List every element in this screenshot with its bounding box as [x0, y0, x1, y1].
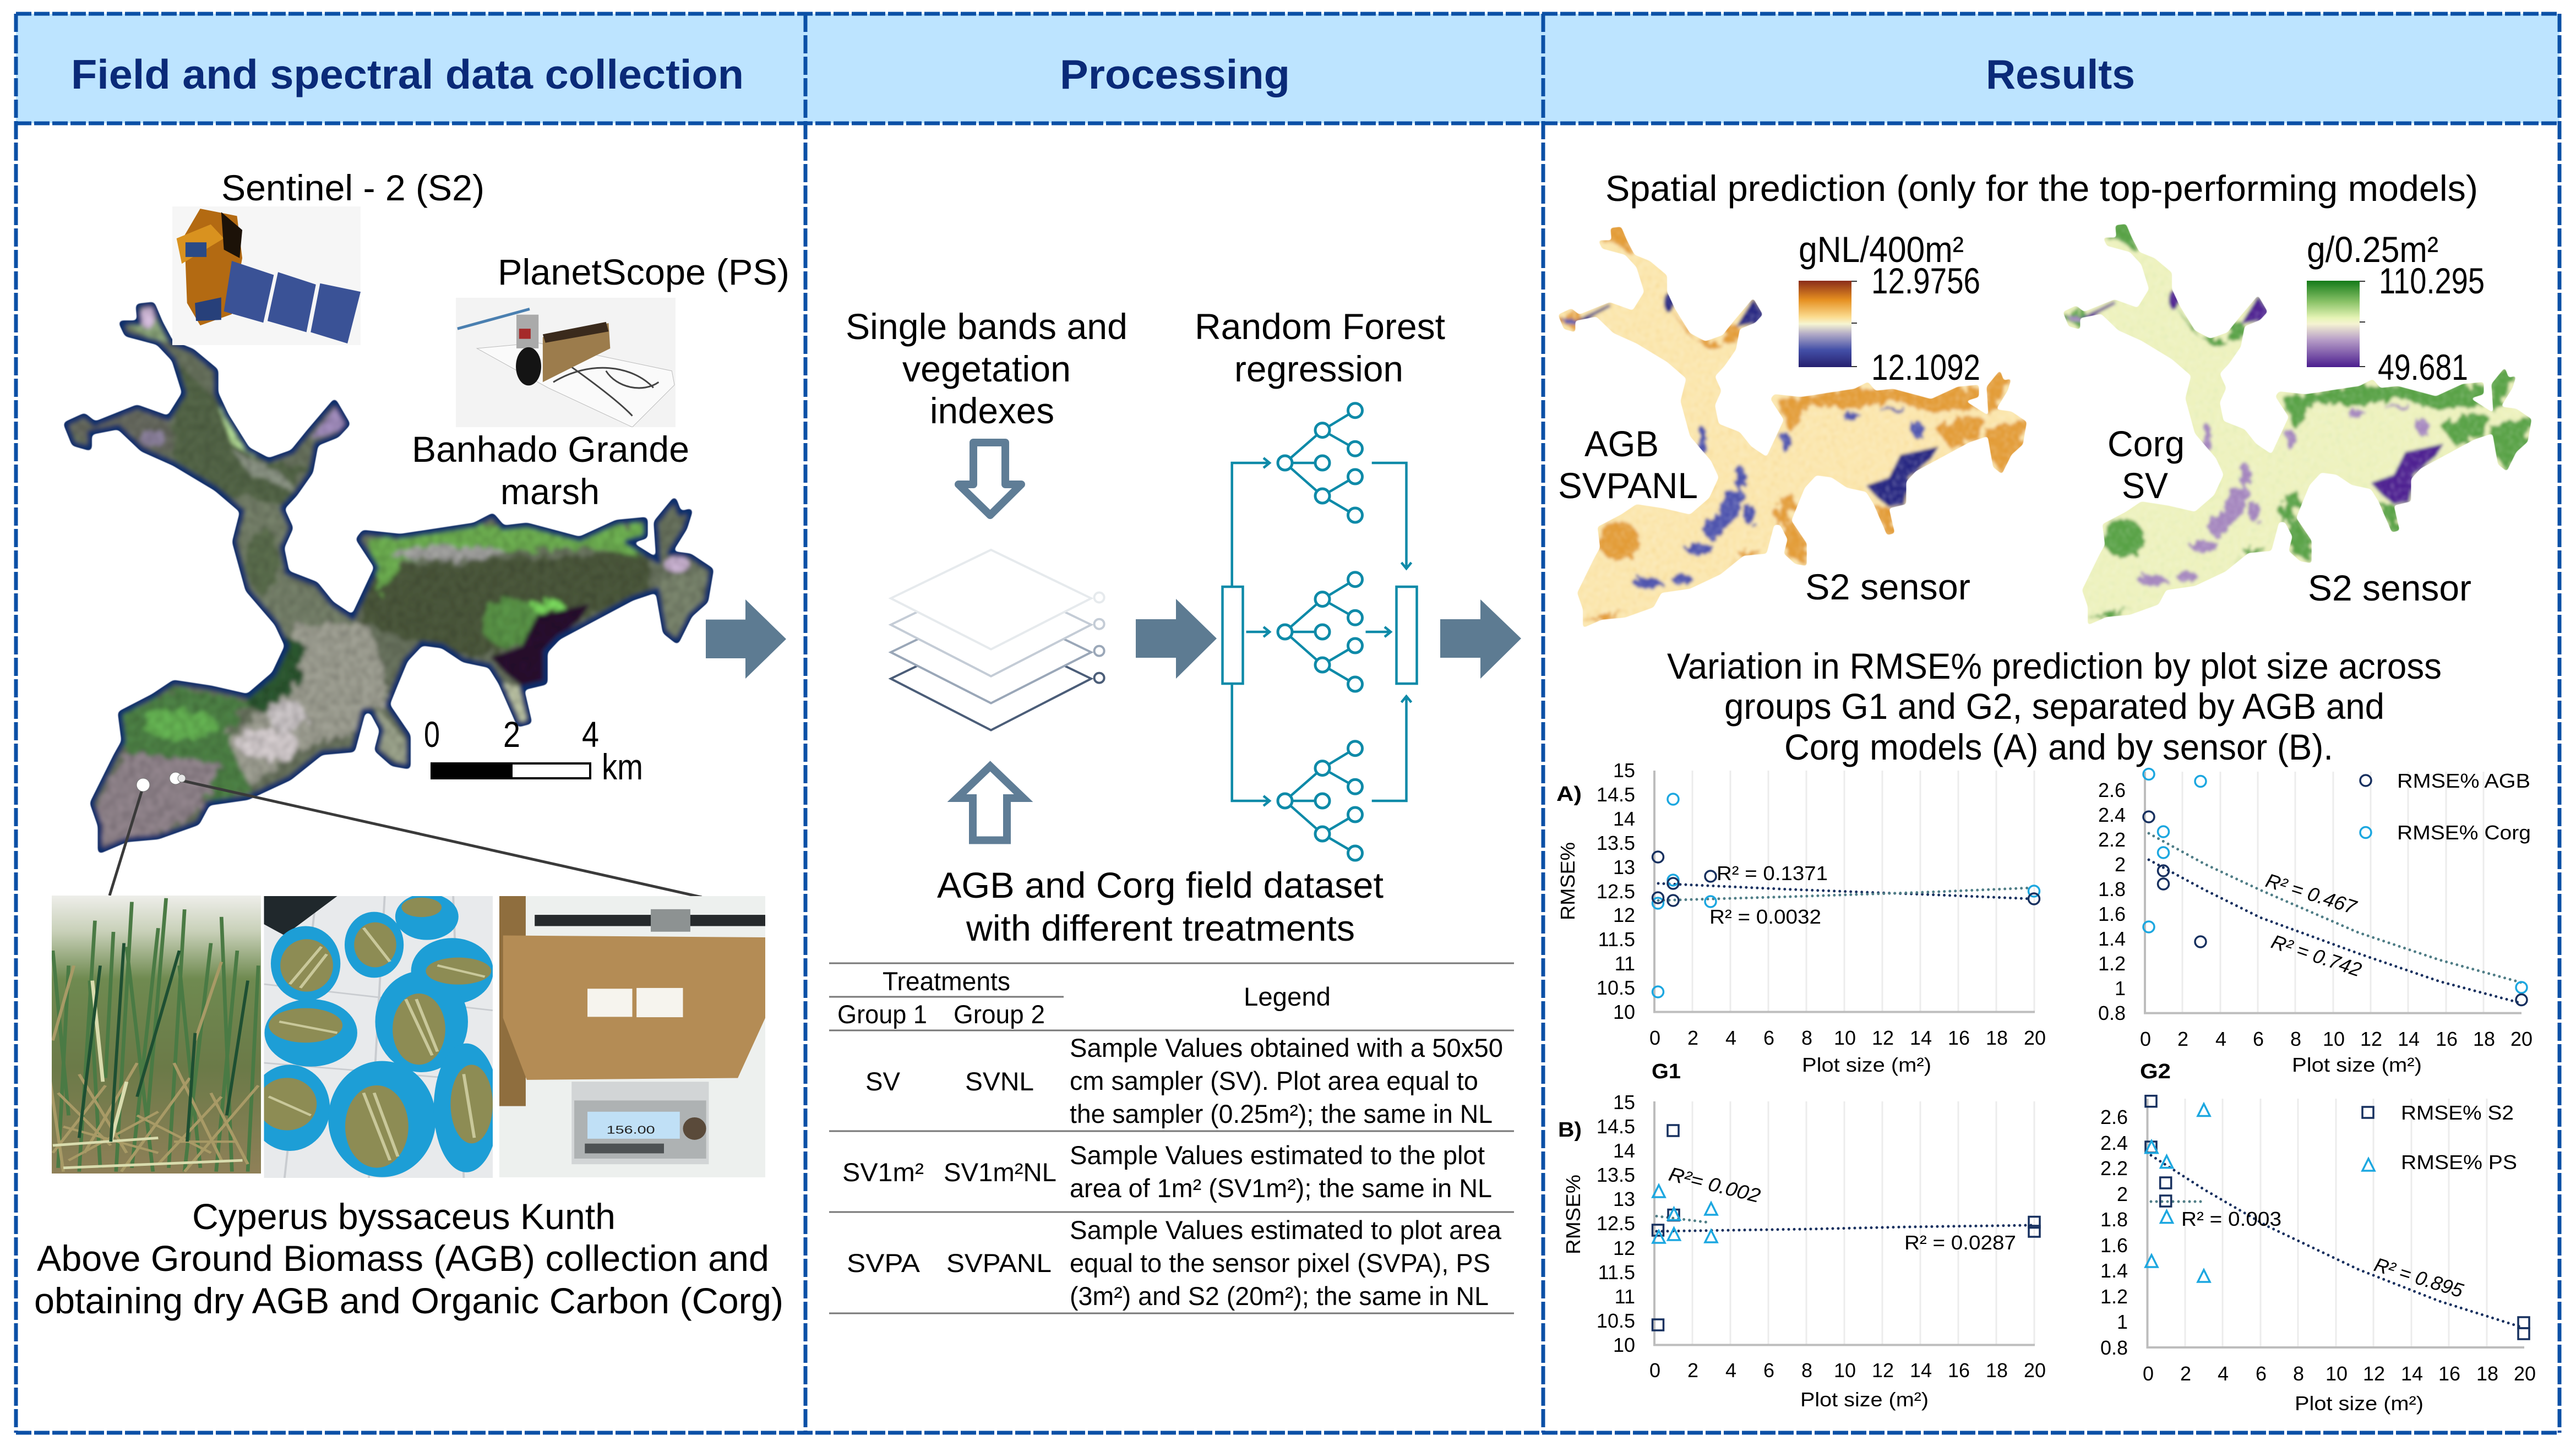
chart: A) G1 RMSE by plot size: 12.5 [1597, 880, 1635, 903]
chart: B) G1 RMSE by plot size: 14.5 [1597, 1115, 1635, 1138]
chart: B) G1 RMSE by plot size: 20 [2024, 1359, 2046, 1382]
legend: AGB colour scale: 12.1092 [1871, 347, 1980, 387]
scale bar: 0 [424, 714, 440, 755]
chart: B) G2 RMSE by plot size: 0 [2143, 1362, 2154, 1385]
arrow: layers to random forest [1136, 599, 1217, 679]
arrow: hollow up [957, 766, 1023, 840]
chart: A) G2 RMSE by plot size: 2 [2177, 1028, 2188, 1050]
chart: B) G1 RMSE by plot size: 15 [1613, 1091, 1635, 1114]
chart: B) G2 RMSE by plot size: 4 [2218, 1362, 2229, 1385]
chart: A) G2 RMSE by plot size: 14 [2398, 1028, 2420, 1050]
labels: AGB SVPANL and S2 sensor: SVPANL [1558, 465, 1698, 506]
chart: B) G1 RMSE by plot size: 10 [1613, 1334, 1635, 1356]
caption: species and AGB collection [34, 1196, 783, 1321]
chart: A) G2 RMSE by plot size: 1.2 [2098, 952, 2126, 975]
panel: results [1549, 51, 2543, 1415]
text: RMSE variation description: Corg models (A) and by sensor (B). [1784, 727, 2333, 767]
chart: B) G2 RMSE by plot size: R² = 0.895 [2372, 1253, 2466, 1302]
chart: A) G1 RMSE by plot size: RMSE% [1556, 842, 1579, 920]
chart: A) G2 RMSE by plot size: 8 [2290, 1028, 2301, 1050]
chart: A) G1 RMSE by plot size: 0 [1649, 1027, 1660, 1049]
chart: B) G1 RMSE by plot size: 11.5 [1598, 1261, 1635, 1284]
chart: B) G2 RMSE by plot size: 1.4 [2100, 1259, 2128, 1282]
label: AGB and Corg field dataset: AGB and Corg field dataset [937, 865, 1384, 905]
labels: Corg SV and S2 sensor [2107, 423, 2471, 608]
chart: B) G2 RMSE by plot size: 0.8 [2100, 1336, 2128, 1359]
table: treatments and legend: the sampler (0.25m²); the same in NL [1070, 1099, 1493, 1128]
scale bar: 2 [503, 714, 520, 755]
chart: A) G2 RMSE by plot size: 4 [2215, 1028, 2226, 1050]
chart: B) G2 RMSE by plot size: 18 [2476, 1362, 2498, 1385]
chart: A) G1 RMSE by plot size: 11 [1615, 952, 1635, 975]
chart: A) G1 RMSE by plot size: 14.5 [1597, 783, 1635, 806]
label: Sentinel-2: Sentinel - 2 (S2) [221, 167, 484, 208]
chart: B) G2 RMSE by plot size: 16 [2438, 1362, 2460, 1385]
chart: B) G2 RMSE by plot size: 12 [2363, 1362, 2385, 1385]
table: treatments and legend: SV1m²NL [944, 1158, 1056, 1187]
legend: AGB and Corg markers: RMSE% AGB [2397, 769, 2530, 792]
scale bar: 4 [582, 714, 599, 755]
callout lines from sample sites to photos [110, 772, 702, 897]
arrow: hollow down [958, 443, 1021, 515]
chart: B) G2 RMSE by plot size [2100, 1096, 2536, 1415]
chart: A) G1 RMSE by plot size: 13 [1613, 856, 1635, 878]
chart: A) G2 RMSE by plot size: 1 [2115, 977, 2126, 1000]
chart: B) G1 RMSE by plot size: 13 [1613, 1188, 1635, 1210]
chart: B) G2 RMSE by plot size: 6 [2256, 1362, 2267, 1385]
photo: Cyperus byssaceus stand [52, 896, 261, 1173]
chart: A) G1 RMSE by plot size: Plot size (m²) [1802, 1054, 1931, 1076]
chart: A) G2 RMSE by plot size: 12 [2360, 1028, 2382, 1050]
chart: A) G1 RMSE by plot size: 13.5 [1597, 832, 1635, 854]
chart: A) G1 RMSE by plot size: 20 [2024, 1027, 2046, 1049]
chart: B) G2 RMSE by plot size: Plot size (m²) [2295, 1392, 2423, 1415]
chart: B) G1 RMSE by plot size: 8 [1801, 1359, 1812, 1382]
chart: B) G1 RMSE by plot size: 11 [1615, 1285, 1635, 1308]
label: AGB and Corg field dataset [937, 865, 1384, 948]
chart: A) G2 RMSE by plot size: Plot size (m²) [2292, 1054, 2422, 1076]
chart: A) G1 RMSE by plot size: 2 [1687, 1027, 1698, 1049]
table: treatments and legend: Group 1 [837, 1000, 927, 1029]
chart: A) G2 RMSE by plot size: 1.6 [2098, 903, 2126, 925]
chart: B) G1 RMSE by plot size: R²= 0.002 [1666, 1162, 1763, 1207]
scale bar: km [602, 746, 643, 787]
chart: B) G2 RMSE by plot size: 14 [2401, 1362, 2423, 1385]
labels: Corg SV and S2 sensor: SV [2122, 465, 2168, 506]
legend: AGB colour scale [1799, 229, 1980, 387]
caption: species and AGB collection: Above Ground Biomass (AGB) collection and [37, 1238, 769, 1279]
table: treatments and legend: (3m²) and S2 (20m²); the same in NL [1070, 1281, 1489, 1311]
chart: A) G2 RMSE by plot size [2098, 768, 2533, 1083]
legend: Corg colour scale: 110.295 [2379, 260, 2485, 301]
legend: AGB and Corg markers: RMSE% Corg [2397, 821, 2531, 844]
arrow: field data to processing [706, 599, 786, 679]
chart: A) G1 RMSE by plot size: 6 [1763, 1027, 1774, 1049]
chart: A) G2 RMSE by plot size: 18 [2473, 1028, 2495, 1050]
chart: A) G1 RMSE by plot size: 10 [1834, 1027, 1856, 1049]
heading: processing: Processing [1060, 51, 1290, 97]
label: Banhado Grande marsh [412, 429, 689, 512]
chart: A) G2 RMSE by plot size: 1.8 [2098, 878, 2126, 900]
heading: results: Results [1986, 51, 2135, 97]
icon: PlanetScope satellite image [456, 298, 676, 427]
table: treatments and legend: SV1m² [842, 1158, 924, 1187]
arrow: processing to results [1440, 599, 1521, 679]
chart: A) G1 RMSE by plot size: 11.5 [1598, 928, 1635, 951]
chart: A) G2 RMSE by plot size: 6 [2253, 1028, 2264, 1050]
chart: A) G2 RMSE by plot size: 10 [2323, 1028, 2345, 1050]
table: treatments and legend: Treatments [883, 967, 1010, 996]
chart: A) G2 RMSE by plot size: 1.4 [2098, 927, 2126, 950]
labels: AGB SVPANL and S2 sensor [1558, 423, 1970, 607]
table: treatments and legend: SVNL [965, 1067, 1034, 1096]
chart: A) G1 RMSE by plot size: 8 [1801, 1027, 1812, 1049]
table: treatments and legend: SVPA [847, 1248, 921, 1278]
table: treatments and legend: Sample Values estimated to plot area [1070, 1215, 1502, 1244]
labels: Corg SV and S2 sensor: Corg [2107, 423, 2185, 464]
caption: species and AGB collection: Cyperus byssaceus Kunth [192, 1196, 616, 1237]
labels: Corg SV and S2 sensor: S2 sensor [2308, 567, 2471, 608]
icon: Sentinel-2 satellite image [172, 206, 361, 345]
label: single bands and vegetation indexes: vegetation [902, 348, 1071, 389]
chart: A) G2 RMSE by plot size: R² = 0.467 [2263, 869, 2360, 919]
chart: B) G2 RMSE by plot size: 2.4 [2100, 1132, 2128, 1154]
photo: biomass samples in blue bags [264, 896, 493, 1178]
chart: A) G2 RMSE by plot size: 2.2 [2098, 828, 2126, 851]
label: AGB and Corg field dataset: with different treatments [966, 908, 1355, 948]
label: PlanetScope: PlanetScope (PS) [498, 252, 789, 292]
label: Banhado Grande marsh: marsh [500, 471, 600, 512]
photo: dried sample bag on a weighing scale [499, 896, 765, 1177]
legend: AGB colour scale: 12.9756 [1871, 260, 1980, 301]
chart: A) G2 RMSE by plot size: R² = 0.742 [2268, 930, 2365, 981]
legend: S2 and PS markers: RMSE% PS [2401, 1151, 2517, 1173]
map: Corg prediction SV [2054, 219, 2543, 631]
chart: B) G2 RMSE by plot size: 2 [2180, 1362, 2191, 1385]
table: treatments and legend: equal to the sensor pixel (SVPA), PS [1070, 1248, 1490, 1278]
label: single bands and vegetation indexes [846, 306, 1128, 431]
chart: A) G2 RMSE by plot size: 2.4 [2098, 804, 2126, 826]
chart: A) G1 RMSE by plot size: 15 [1613, 759, 1635, 782]
chart: B) G2 RMSE by plot size: 1.6 [2100, 1234, 2128, 1257]
panel: processing [829, 51, 1514, 1313]
label: random forest regression: regression [1234, 348, 1403, 389]
chart: A) G1 RMSE by plot size: R² = 0.0032 [1709, 905, 1821, 928]
chart: A) G1 RMSE by plot size: 12 [1613, 904, 1635, 926]
chart: A) G1 RMSE by plot size: G1 [1652, 1060, 1681, 1083]
chart: B) G2 RMSE by plot size: 20 [2514, 1362, 2536, 1385]
table: treatments and legend: SV [865, 1067, 901, 1096]
table: treatments and legend: Sample Values estimated to the plot [1070, 1140, 1485, 1170]
chart: B) G1 RMSE by plot size: 16 [1948, 1359, 1970, 1382]
legend: Corg colour scale [2307, 229, 2485, 387]
label: random forest regression [1195, 306, 1445, 389]
chart: B) G1 RMSE by plot size: 12.5 [1597, 1212, 1635, 1235]
chart: A) G1 RMSE by plot size: A) [1556, 783, 1582, 806]
chart: B) G1 RMSE by plot size [1558, 1091, 2046, 1411]
chart: B) G1 RMSE by plot size: 12 [1872, 1359, 1894, 1382]
chart: B) G1 RMSE by plot size: 14 [1613, 1139, 1635, 1162]
chart: B) G2 RMSE by plot size: 2.2 [2100, 1157, 2128, 1180]
legend: Corg colour scale: g/0.25m² [2307, 229, 2438, 270]
chart: B) G1 RMSE by plot size: B) [1558, 1118, 1582, 1142]
legend: AGB colour scale: gNL/400m² [1799, 229, 1964, 270]
chart: B) G1 RMSE by plot size: 13.5 [1597, 1164, 1635, 1186]
chart: B) G2 RMSE by plot size: R² = 0.003 [2181, 1208, 2281, 1230]
labels: AGB SVPANL and S2 sensor: S2 sensor [1805, 566, 1970, 607]
label: random forest regression: Random Forest [1195, 306, 1445, 347]
chart: B) G1 RMSE by plot size: R² = 0.0287 [1904, 1231, 2016, 1254]
chart: A) G2 RMSE by plot size: 16 [2436, 1028, 2458, 1050]
chart: B) G2 RMSE by plot size: 8 [2293, 1362, 2304, 1385]
chart: A) G1 RMSE by plot size: 14 [1910, 1027, 1932, 1049]
label: single bands and vegetation indexes: Single bands and [846, 306, 1128, 347]
legend: AGB and Corg markers [2360, 769, 2531, 844]
chart: A) G1 RMSE by plot size [1556, 759, 2046, 1083]
table: treatments and legend: SVPANL [946, 1248, 1052, 1278]
chart: A) G2 RMSE by plot size: G2 [2140, 1060, 2171, 1083]
heading: field and spectral data collection: Field and spectral data collection [71, 51, 744, 97]
chart: A) G1 RMSE by plot size: 4 [1725, 1027, 1736, 1049]
text: RMSE variation description: groups G1 and G2, separated by AGB and [1724, 686, 2384, 727]
chart: B) G1 RMSE by plot size: 0 [1649, 1359, 1660, 1382]
chart: A) G2 RMSE by plot size: 0.8 [2098, 1002, 2126, 1024]
legend: S2 and PS markers: RMSE% S2 [2401, 1101, 2514, 1124]
chart: B) G1 RMSE by plot size: Plot size (m²) [1800, 1388, 1929, 1411]
chart: B) G2 RMSE by plot size: 1.2 [2100, 1285, 2128, 1308]
chart: A) G2 RMSE by plot size: 2 [2115, 853, 2126, 876]
chart: A) G2 RMSE by plot size: 20 [2510, 1028, 2533, 1050]
chart: A) G1 RMSE by plot size: 10 [1613, 1001, 1635, 1023]
chart: B) G1 RMSE by plot size: 6 [1763, 1359, 1774, 1382]
chart: B) G2 RMSE by plot size: 1.8 [2100, 1208, 2128, 1231]
table: treatments and legend: Sample Values obtained with a 50x50 [1070, 1033, 1503, 1062]
icon: stacked raster layers [891, 550, 1104, 730]
map: AGB prediction SVPANL [1549, 222, 2038, 634]
chart: B) G1 RMSE by plot size: 10.5 [1597, 1309, 1635, 1332]
diagram: random forest trees [1222, 403, 1417, 860]
chart: B) G1 RMSE by plot size: RMSE% [1562, 1175, 1584, 1254]
chart: B) G1 RMSE by plot size: 12 [1613, 1237, 1635, 1259]
chart: B) G1 RMSE by plot size: 2 [1687, 1359, 1698, 1382]
panel headers background [16, 14, 2559, 123]
chart: B) G1 RMSE by plot size: 10 [1834, 1359, 1856, 1382]
heading: spatial prediction: Spatial prediction (only for the top-performing models) [1605, 168, 2478, 209]
legend: S2 and PS markers [2362, 1101, 2517, 1173]
text: RMSE variation description: Variation in RMSE% prediction by plot size across [1667, 646, 2442, 686]
panel: field and spectral data collection [34, 51, 789, 1321]
table: treatments and legend [829, 963, 1514, 1313]
table: treatments and legend: area of 1m² (SV1m²); the same in NL [1070, 1173, 1492, 1203]
map: Banhado Grande marsh false colour image [53, 298, 727, 859]
chart: B) G2 RMSE by plot size: 1 [2117, 1311, 2128, 1333]
scale bar [424, 714, 643, 787]
chart: A) G1 RMSE by plot size: 10.5 [1597, 976, 1635, 999]
chart: B) G2 RMSE by plot size: 2.6 [2100, 1106, 2128, 1128]
chart: A) G1 RMSE by plot size: 18 [1986, 1027, 2008, 1049]
legend: Corg colour scale: 49.681 [2378, 347, 2468, 387]
labels: AGB SVPANL and S2 sensor: AGB [1584, 423, 1659, 464]
photo: dried sample bag on a weighing scale: 156.00 [607, 1123, 655, 1136]
chart: B) G2 RMSE by plot size: 10 [2326, 1362, 2348, 1385]
text: RMSE variation description [1667, 646, 2442, 767]
chart: B) G2 RMSE by plot size: 2 [2117, 1183, 2128, 1205]
chart: A) G1 RMSE by plot size: R² = 0.1371 [1717, 862, 1828, 885]
chart: A) G2 RMSE by plot size: 2.6 [2098, 779, 2126, 801]
chart: B) G1 RMSE by plot size: 18 [1986, 1359, 2008, 1382]
table: treatments and legend: Group 2 [954, 1000, 1045, 1029]
chart: A) G1 RMSE by plot size: 16 [1948, 1027, 1970, 1049]
label: single bands and vegetation indexes: indexes [930, 390, 1054, 431]
chart: A) G2 RMSE by plot size: 0 [2140, 1028, 2151, 1050]
caption: species and AGB collection: obtaining dry AGB and Organic Carbon (Corg) [34, 1280, 783, 1321]
chart: B) G1 RMSE by plot size: 4 [1725, 1359, 1736, 1382]
chart: B) G1 RMSE by plot size: 14 [1910, 1359, 1932, 1382]
chart: A) G1 RMSE by plot size: 12 [1872, 1027, 1894, 1049]
chart: A) G1 RMSE by plot size: 14 [1613, 807, 1635, 830]
label: Banhado Grande marsh: Banhado Grande [412, 429, 689, 470]
table: treatments and legend: Legend [1244, 982, 1331, 1011]
table: treatments and legend: cm sampler (SV). Plot area equal to [1070, 1066, 1478, 1095]
